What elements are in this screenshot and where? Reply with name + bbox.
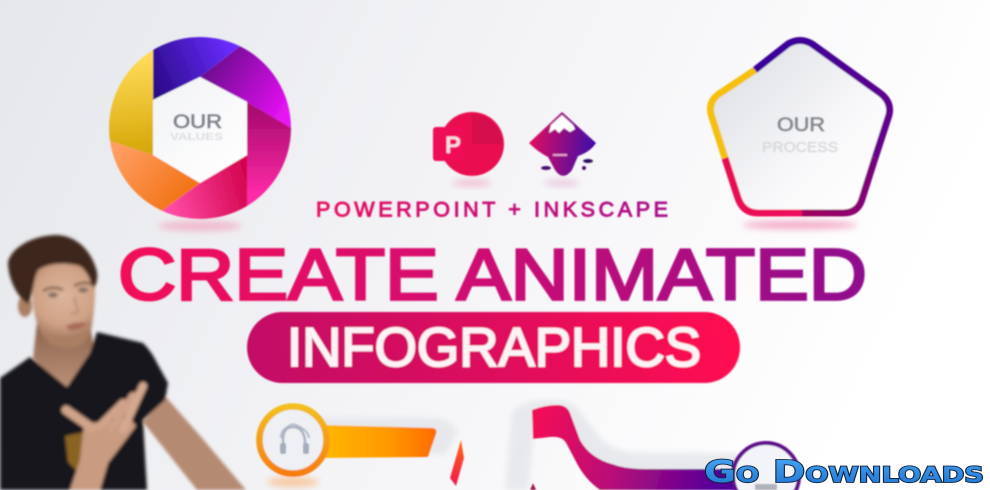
timeline ribbon: headphones step: [260, 406, 458, 487]
arm: [143, 396, 246, 490]
hair: [8, 235, 97, 304]
title: CREATE ANIMATED: [118, 236, 867, 316]
circle segment: yellow: [109, 50, 153, 155]
pentagon outline: dark magenta: [802, 158, 875, 213]
label: our: OUR: [173, 112, 222, 133]
icon: Inkscape: [529, 112, 596, 186]
pentagon outline: red: [725, 158, 802, 213]
ear: [18, 295, 32, 317]
neck: [33, 322, 95, 392]
timeline ribbon: curved wave: [450, 400, 740, 490]
red slash: [450, 440, 464, 486]
purple ring: [733, 443, 799, 490]
shirt: [0, 332, 168, 490]
circle segment: purple: [200, 46, 291, 128]
circle segment: indigo: [153, 37, 240, 100]
watermark: go downloads: Go Downloads: [704, 455, 984, 490]
label: process: PROCESS: [762, 139, 838, 156]
circle segment: magenta: [247, 102, 291, 206]
face: [32, 260, 95, 349]
hexagon centre: [153, 77, 247, 183]
circle diagram: our values: [109, 37, 291, 231]
icon: PowerPoint: P: [445, 132, 461, 159]
ring with headphones icon: [260, 406, 326, 474]
pentagon diagram: our process: [710, 40, 890, 229]
wave band: [532, 405, 740, 490]
icon: PowerPoint: [433, 112, 504, 186]
subheading: POWERPOINT + INKSCAPE: [316, 198, 668, 222]
circle segment: orange: [110, 141, 200, 211]
pill: infographics: INFOGRAPHICS: [287, 316, 701, 378]
hand: [66, 386, 143, 490]
circle segment: pink: [162, 155, 247, 219]
pentagon outline: yellow: [710, 70, 755, 158]
eyes and brows: [43, 283, 92, 330]
presenter photo: [0, 235, 246, 490]
label: values: VALUES: [170, 131, 223, 143]
pentagon outline: purple: [755, 40, 890, 158]
shirt print: [65, 432, 88, 472]
label: our: OUR: [777, 115, 825, 136]
orange bar: [322, 425, 436, 458]
pentagon fill: [710, 40, 890, 213]
